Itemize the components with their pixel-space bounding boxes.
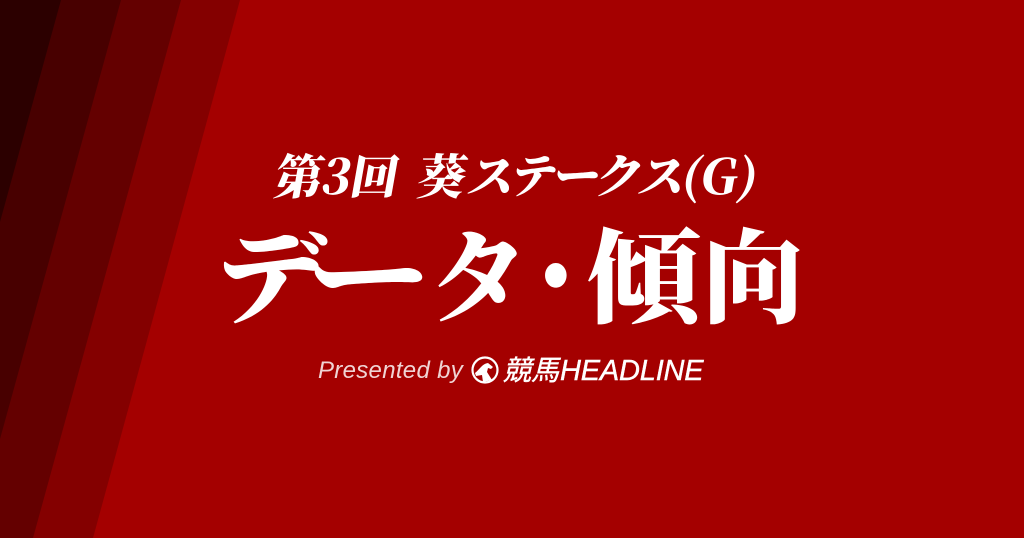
- main title: タ: [431, 197, 527, 344]
- main title: [213, 197, 804, 344]
- subtitle: ステークス: [463, 140, 689, 207]
- main title: 傾: [587, 197, 700, 344]
- subtitle: 第3回: [270, 139, 405, 208]
- main title: ー: [306, 197, 430, 344]
- main title: ・: [511, 197, 601, 344]
- logo wordmark: HEADLINE: [560, 355, 703, 387]
- subtitle: 葵: [413, 139, 473, 208]
- presented by text: Presented by: [318, 357, 463, 384]
- main title: デ: [213, 197, 327, 344]
- logo wordmark: 競馬: [503, 355, 559, 386]
- subtitle: (G): [677, 139, 765, 208]
- main title: 向: [701, 197, 804, 344]
- subtitle: [270, 139, 765, 208]
- icon: horse logo: [471, 356, 499, 384]
- presented by line: [318, 355, 704, 387]
